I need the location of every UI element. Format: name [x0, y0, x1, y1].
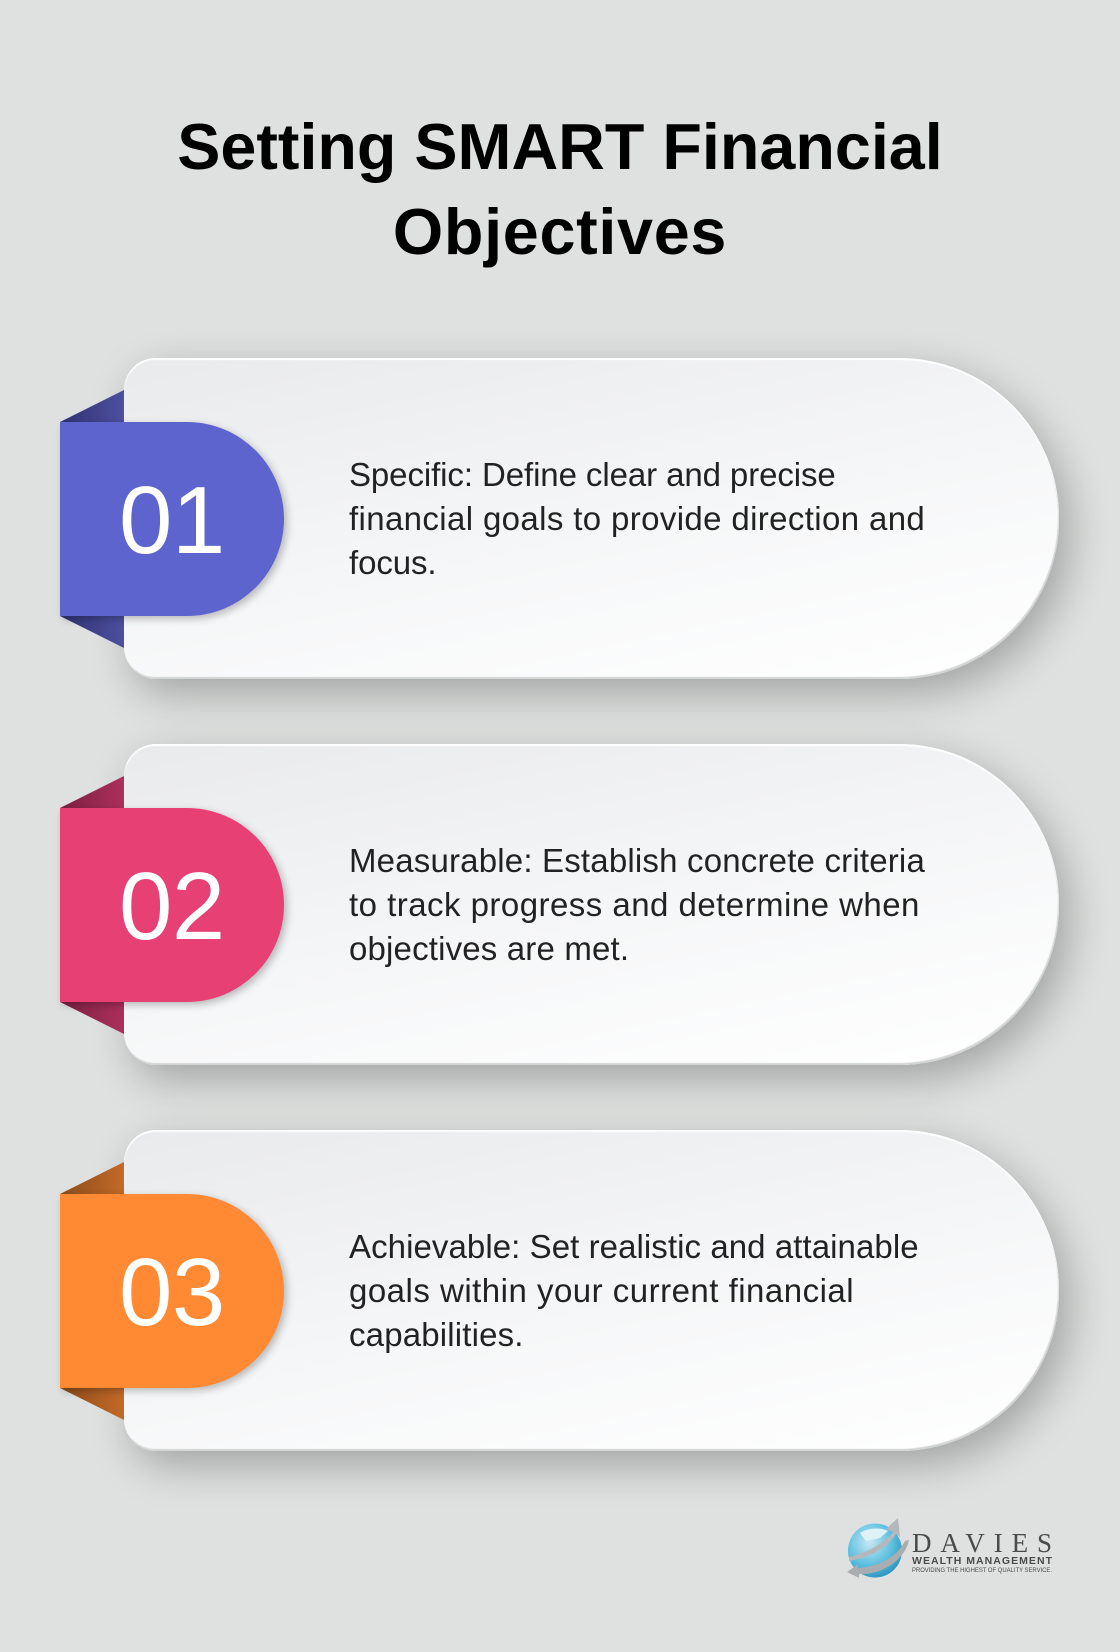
panel: step 02: [59, 736, 1090, 1101]
text: measurable: objectives are met.: [349, 930, 629, 967]
text: measurable: [349, 842, 925, 967]
title: Setting SMART Financial: [177, 110, 943, 183]
icon: globe with arrows: [847, 1518, 909, 1578]
wordmark: PROVIDING THE HIGHEST OF QUALITY SERVICE.: [912, 1567, 1052, 1574]
number badge 02: [60, 808, 284, 1002]
ribbon fold 03: [60, 1162, 124, 1420]
title: [177, 110, 943, 268]
card 02: [124, 744, 1059, 1065]
text: specific: Specific: Define clear and precise: [349, 456, 836, 493]
text: achievable: [349, 1228, 919, 1353]
ribbon fold 02: [60, 776, 124, 1034]
wordmark: WEALTH MANAGEMENT: [912, 1555, 1053, 1567]
number badge 01: [60, 422, 284, 616]
text: achievable: capabilities.: [349, 1316, 524, 1353]
panel: step 01: [59, 350, 1090, 715]
text: measurable: Measurable: Establish concrete criteria: [349, 842, 925, 879]
ribbon fold 01: [60, 390, 124, 648]
logo: Davies Wealth Management: [847, 1518, 1053, 1578]
text: achievable: Achievable: Set realistic and attainable: [349, 1228, 919, 1265]
wordmark: DAVIES: [912, 1528, 1052, 1558]
text: specific: [349, 456, 925, 581]
card 01: [124, 358, 1059, 679]
title: Objectives: [393, 195, 727, 268]
number badge 02: 02: [119, 853, 225, 960]
panel: step 03: [59, 1122, 1090, 1487]
text: achievable: goals within your current financial: [349, 1272, 854, 1309]
wordmark: [912, 1528, 1053, 1574]
number badge 03: 03: [119, 1239, 225, 1346]
text: specific: focus.: [349, 544, 436, 581]
number badge 01: 01: [119, 467, 225, 574]
text: specific: financial goals to provide direction and: [349, 500, 925, 537]
number badge 03: [60, 1194, 284, 1388]
text: measurable: to track progress and determine when: [349, 886, 920, 923]
card 03: [124, 1130, 1059, 1451]
